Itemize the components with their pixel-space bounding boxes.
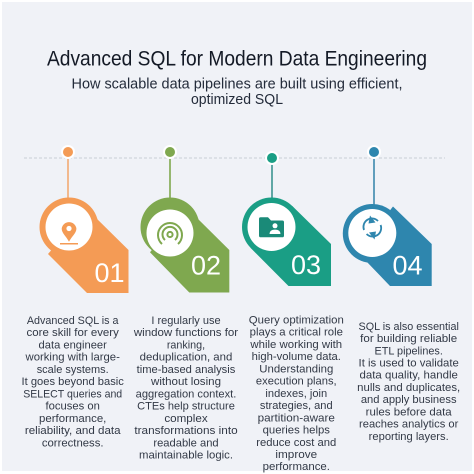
step 02 marker bbox=[163, 145, 177, 199]
text block: step 03: partition-aware bbox=[258, 412, 335, 424]
text block: step 03: indexes, join bbox=[265, 388, 327, 400]
step 03 marker bbox=[265, 151, 279, 199]
text block: step 03: strategies, and bbox=[260, 400, 333, 412]
step 03 badge bbox=[242, 198, 331, 286]
text block: step 04: It is used to validate bbox=[359, 358, 459, 370]
text block: step 01: It goes beyond basic bbox=[22, 376, 124, 388]
text block: step 01: data engineer bbox=[39, 340, 107, 352]
text block: step 03 bbox=[249, 314, 344, 473]
text block: step 02: maintainable logic. bbox=[139, 450, 233, 462]
text block: step 03: execution plans, bbox=[256, 376, 337, 388]
text block: step 03: high-volume data. bbox=[252, 351, 341, 363]
text block: step 01 bbox=[22, 315, 124, 449]
text block: step 02: time-based analysis bbox=[137, 364, 236, 376]
text block: step 03: improve bbox=[275, 449, 317, 461]
text block: step 04: reporting layers. bbox=[369, 431, 449, 443]
step 04 marker bbox=[367, 145, 381, 205]
icon: sync arrows bbox=[363, 216, 381, 240]
text block: step 04: reaches analytics or bbox=[359, 419, 459, 431]
text block: step 03: performance. bbox=[263, 461, 330, 473]
text block: step 03: Understanding bbox=[259, 363, 333, 375]
step 04 badge bbox=[343, 204, 432, 286]
text block: step 01: focuses on bbox=[46, 401, 100, 413]
text block: step 03: reduce cost and bbox=[256, 437, 336, 449]
text block: step 02: CTEs help structure bbox=[137, 401, 235, 413]
number 04: 04 bbox=[392, 250, 423, 280]
text block: step 02: without losing bbox=[150, 376, 221, 388]
number 02: 02 bbox=[191, 250, 221, 280]
text block: step 02: transformations into bbox=[134, 425, 238, 437]
text block: step 01: performance, bbox=[39, 413, 106, 425]
text block: step 02: window functions for bbox=[133, 327, 238, 339]
text block: step 02: complex bbox=[164, 413, 208, 425]
text block: step 01: reliability, and data bbox=[25, 425, 121, 437]
text block: step 01: SELECT queries and bbox=[23, 388, 122, 400]
text block: step 01: scale systems. bbox=[37, 364, 109, 376]
text block: step 02: I regularly use bbox=[151, 315, 221, 327]
icon: folder with person bbox=[259, 217, 284, 237]
text block: step 04: nulls and duplicates, bbox=[357, 382, 460, 394]
text block: step 04: and apply business bbox=[361, 394, 457, 406]
text block: step 02: aggregation context. bbox=[136, 388, 236, 400]
step 01 marker bbox=[61, 145, 75, 199]
text block: step 03: while working with bbox=[249, 339, 342, 351]
step 01 badge bbox=[40, 198, 128, 293]
text block: step 03: plays a critical role bbox=[250, 327, 343, 339]
subtitle: optimized SQL bbox=[191, 92, 283, 108]
text block: step 01: correctness. bbox=[42, 437, 104, 449]
step 02 badge bbox=[140, 198, 229, 292]
text block: step 03: queries helps bbox=[263, 425, 330, 437]
text block: step 04: rules before data bbox=[366, 406, 453, 418]
text block: step 01: core skill for every bbox=[27, 327, 119, 339]
text block: step 01: working with large- bbox=[25, 352, 120, 364]
number 01: 01 bbox=[94, 258, 125, 288]
text block: step 04: SQL is also essential bbox=[359, 321, 459, 333]
text block: step 04: for building reliable bbox=[360, 333, 457, 345]
subtitle bbox=[72, 76, 402, 108]
text block: step 04 bbox=[357, 321, 460, 443]
text block: step 02: ranking, bbox=[167, 340, 205, 352]
title: Advanced SQL for Modern Data Engineering bbox=[47, 48, 427, 70]
text block: step 03: Query optimization bbox=[249, 314, 344, 326]
text block: step 04: ETL pipelines. bbox=[375, 345, 443, 357]
text block: step 02: deduplication, and bbox=[140, 352, 232, 364]
icon: broadcast signal bbox=[158, 223, 182, 244]
text block: step 02 bbox=[133, 315, 238, 462]
text block: step 02: readable and bbox=[153, 437, 219, 449]
number 03: 03 bbox=[291, 250, 321, 280]
subtitle: How scalable data pipelines are built using efficient, bbox=[72, 76, 402, 92]
icon: location pin bbox=[60, 222, 78, 244]
text block: step 01: Advanced SQL is a bbox=[27, 315, 119, 327]
text block: step 04: data quality, handle bbox=[360, 370, 458, 382]
